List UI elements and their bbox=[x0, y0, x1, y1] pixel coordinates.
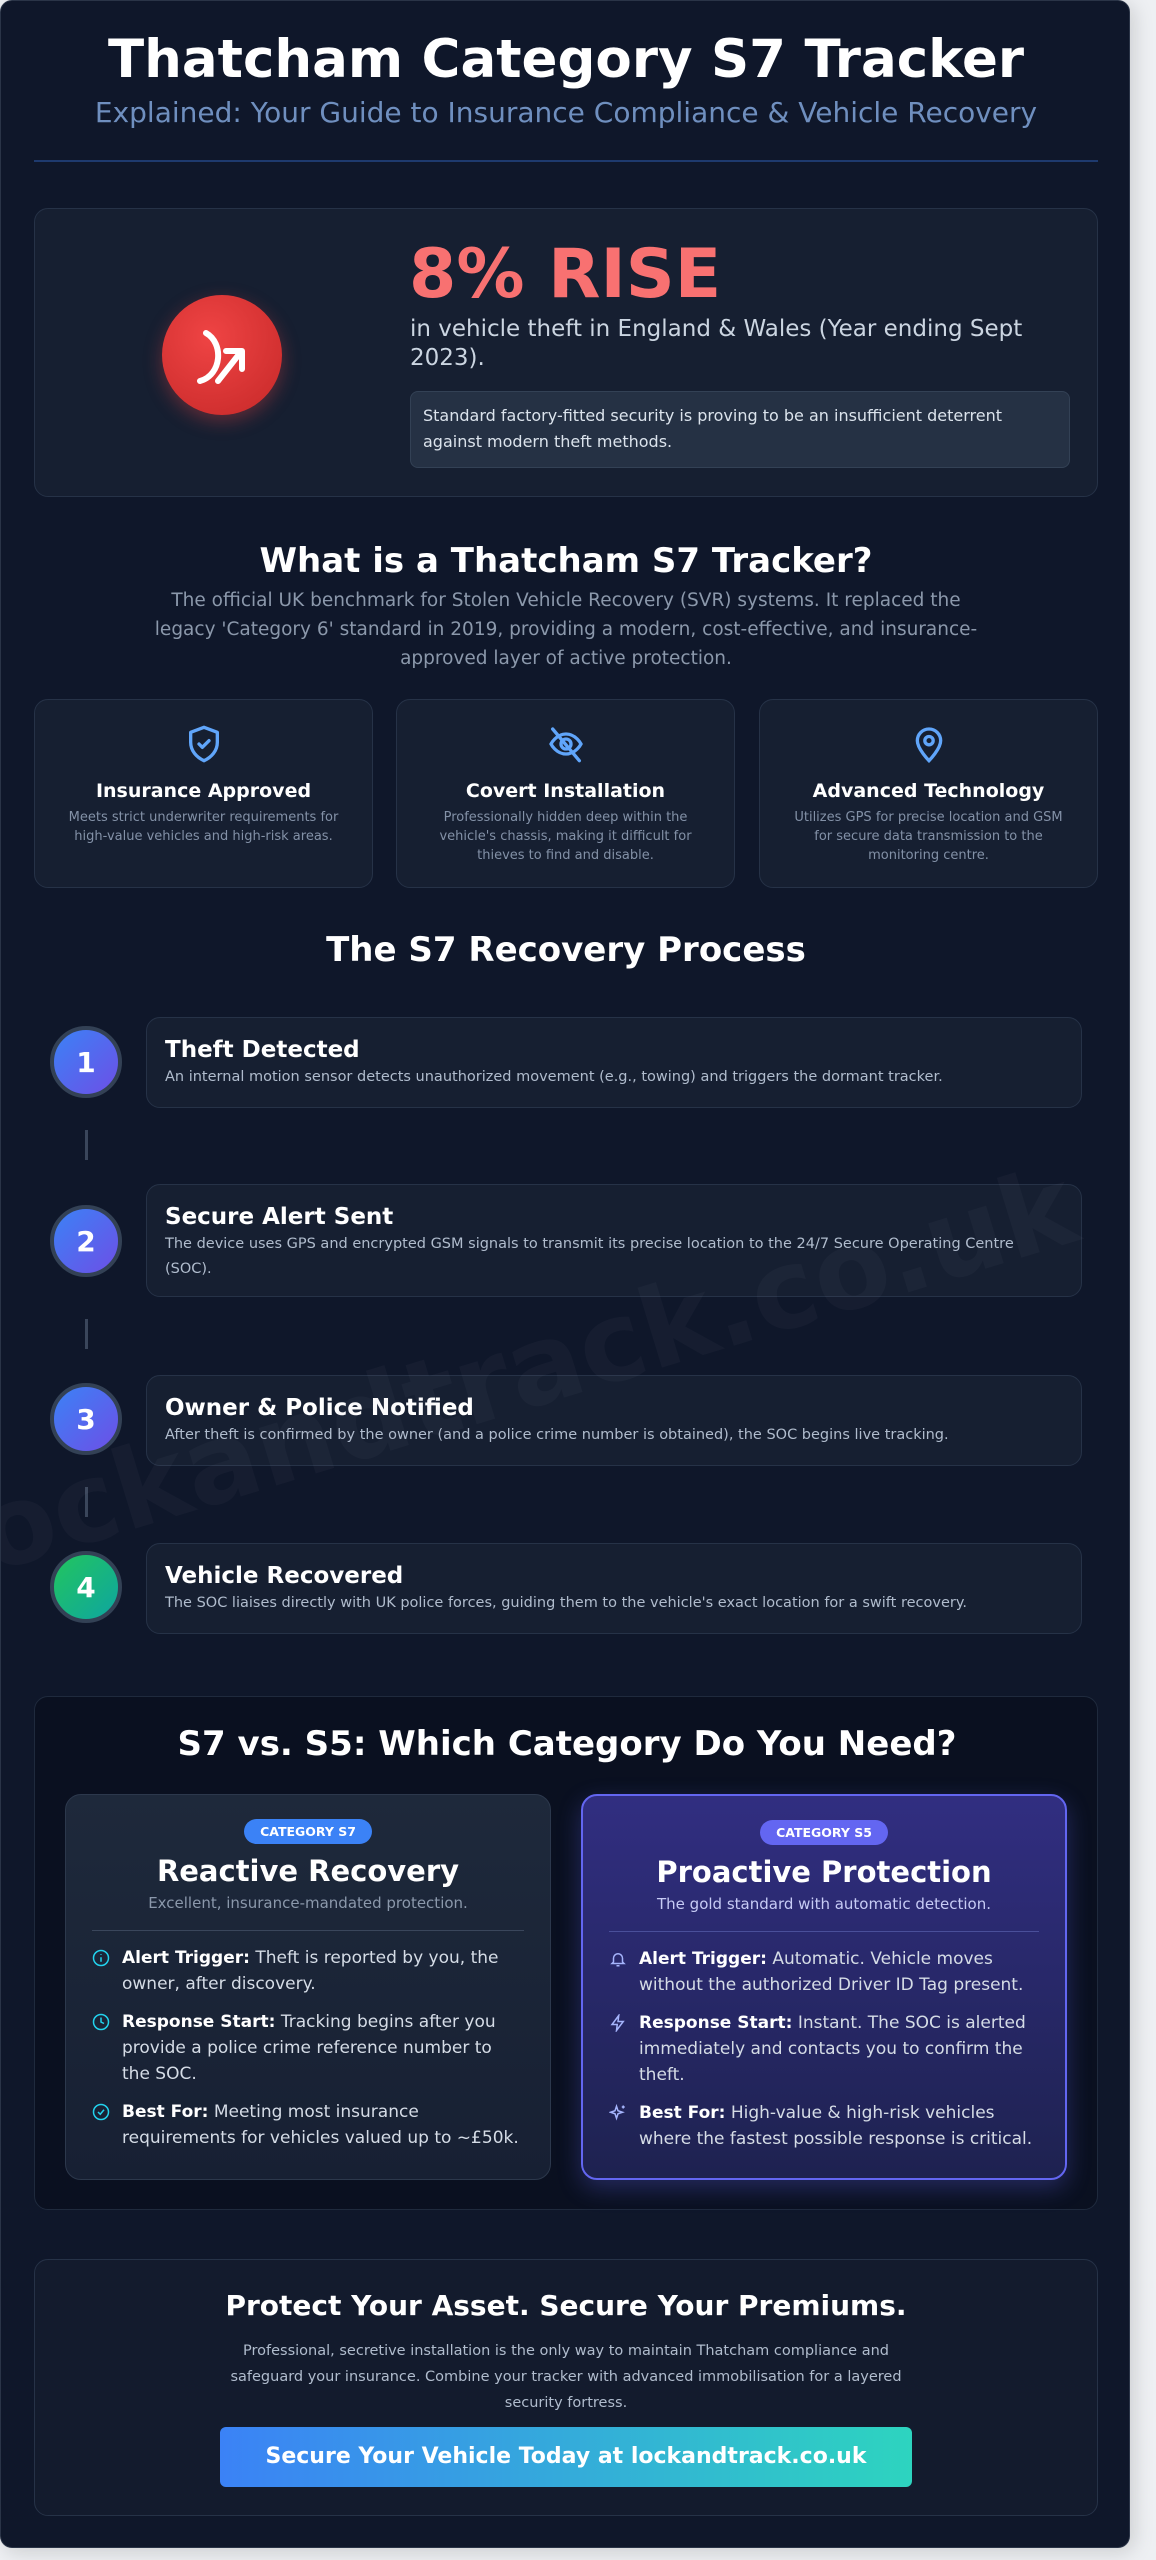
card: S5: Alert Trigger: Automatic. Vehicle moves without the authorized Driver ID Tag present. bbox=[639, 1949, 1023, 1995]
icon: trend arrow bbox=[162, 295, 282, 415]
step 3 card: After theft is confirmed by the owner (and a police crime number is obtained), the SOC begins live tracking. bbox=[165, 1427, 949, 1443]
card: S5: The gold standard with automatic detection. bbox=[657, 1895, 991, 1913]
card: S7: Response Start: Tracking begins after you provide a police crime reference number to the SOC. bbox=[122, 2012, 496, 2084]
CTA heading: Protect Your Asset. Secure Your Premiums. bbox=[225, 2289, 907, 2322]
step 2 number bbox=[50, 1205, 122, 1277]
card: S7: Excellent, insurance-mandated protection. bbox=[148, 1894, 468, 1912]
panel: insurance approved: Meets strict underwriter requirements for high-value vehicles and high-risk areas. bbox=[69, 810, 338, 844]
icon: location pin bbox=[916, 727, 942, 763]
subtitle: Explained: Your Guide to Insurance Compliance & Vehicle Recovery bbox=[95, 96, 1037, 129]
step 3 card bbox=[146, 1375, 1082, 1466]
panel: covert installation bbox=[396, 699, 735, 888]
text: definition: The official UK benchmark for Stolen Vehicle Recovery (SVR) systems. It replaced the legacy 'Category 6' standard in 2019, providing a modern, cost-effective, and insurance-approved layer of active protection. bbox=[155, 590, 977, 669]
panel: advanced technology: Utilizes GPS for precise location and GSM for secure data transmission to the monitoring centre. bbox=[794, 810, 1063, 863]
card: S5: CATEGORY S5 bbox=[776, 1825, 872, 1840]
CTA text: Professional, secretive installation is the only way to maintain Thatcham compliance and safeguard your insurance. Combine your tracker with advanced immobilisation for a layered security fortress. bbox=[230, 2343, 902, 2411]
step 4 card: Vehicle Recovered bbox=[165, 1563, 403, 1589]
note box: Standard factory-fitted security is proving to be an insufficient deterrent against modern theft methods. bbox=[423, 406, 1002, 451]
step 1 card: An internal motion sensor detects unauthorized movement (e.g., towing) and triggers the dormant tracker. bbox=[165, 1069, 943, 1085]
panel: stat bbox=[34, 208, 1098, 497]
heading: what is: What is a Thatcham S7 Tracker? bbox=[260, 541, 872, 581]
icon: eye off bbox=[549, 727, 583, 762]
step 2 card bbox=[146, 1184, 1082, 1297]
panel: insurance approved bbox=[34, 699, 373, 888]
card: S5: Response Start: Instant. The SOC is alerted immediately and contacts you to confirm the theft. bbox=[639, 2013, 1026, 2085]
step 4 card bbox=[146, 1543, 1082, 1634]
step 2 card: Secure Alert Sent bbox=[165, 1204, 393, 1230]
panel: CTA bbox=[34, 2259, 1098, 2516]
card: S5 bbox=[581, 1794, 1067, 2180]
heading: process: The S7 Recovery Process bbox=[326, 930, 806, 970]
step 2 number: 2 bbox=[76, 1224, 96, 1258]
CTA button: Secure Your Vehicle Today at lockandtrack.co.uk bbox=[266, 2444, 866, 2469]
panel: advanced technology bbox=[759, 699, 1098, 888]
heading: comparison: S7 vs. S5: Which Category Do You Need? bbox=[178, 1724, 956, 1764]
card: S5: Proactive Protection bbox=[656, 1855, 992, 1889]
stat text: in vehicle theft in England & Wales (Year ending Sept 2023). bbox=[410, 316, 1022, 371]
step 1 number bbox=[50, 1026, 122, 1098]
step 3 number: 3 bbox=[76, 1402, 96, 1436]
card: S7: Alert Trigger: Theft is reported by you, the owner, after discovery. bbox=[122, 1948, 498, 1994]
panel: comparison bbox=[34, 1696, 1098, 2210]
step 1 card bbox=[146, 1017, 1082, 1108]
panel: covert installation: Covert Installation bbox=[466, 780, 665, 802]
panel: covert installation: Professionally hidden deep within the vehicle's chassis, making it difficult for thieves to find and disable. bbox=[439, 810, 692, 863]
note box bbox=[410, 391, 1070, 468]
step 4 number bbox=[50, 1551, 122, 1623]
step 4 card: The SOC liaises directly with UK police forces, guiding them to the vehicle's exact location for a swift recovery. bbox=[165, 1595, 967, 1611]
step 2 card: The device uses GPS and encrypted GSM signals to transmit its precise location to the 24/7 Secure Operating Centre (SOC). bbox=[165, 1236, 1014, 1277]
card: S7 bbox=[65, 1794, 551, 2180]
card: S7: Reactive Recovery bbox=[157, 1854, 459, 1888]
title: Thatcham Category S7 Tracker bbox=[108, 29, 1024, 90]
card: S7: CATEGORY S7 bbox=[260, 1824, 356, 1839]
icon: shield bbox=[189, 726, 219, 762]
step 4 number: 4 bbox=[76, 1570, 96, 1604]
step 3 number bbox=[50, 1383, 122, 1455]
step 3 card: Owner & Police Notified bbox=[165, 1395, 474, 1421]
panel: advanced technology: Advanced Technology bbox=[813, 780, 1044, 802]
step 1 number: 1 bbox=[76, 1046, 96, 1078]
CTA button bbox=[220, 2427, 912, 2487]
card: S5: Best For: High-value & high-risk vehicles where the fastest possible response is critical. bbox=[639, 2103, 1032, 2149]
step 1 card: Theft Detected bbox=[165, 1037, 360, 1063]
card: S7: Best For: Meeting most insurance requirements for vehicles valued up to ~£50k. bbox=[122, 2102, 519, 2148]
stat number: 8% RISE bbox=[409, 235, 721, 314]
panel: insurance approved: Insurance Approved bbox=[96, 780, 311, 802]
